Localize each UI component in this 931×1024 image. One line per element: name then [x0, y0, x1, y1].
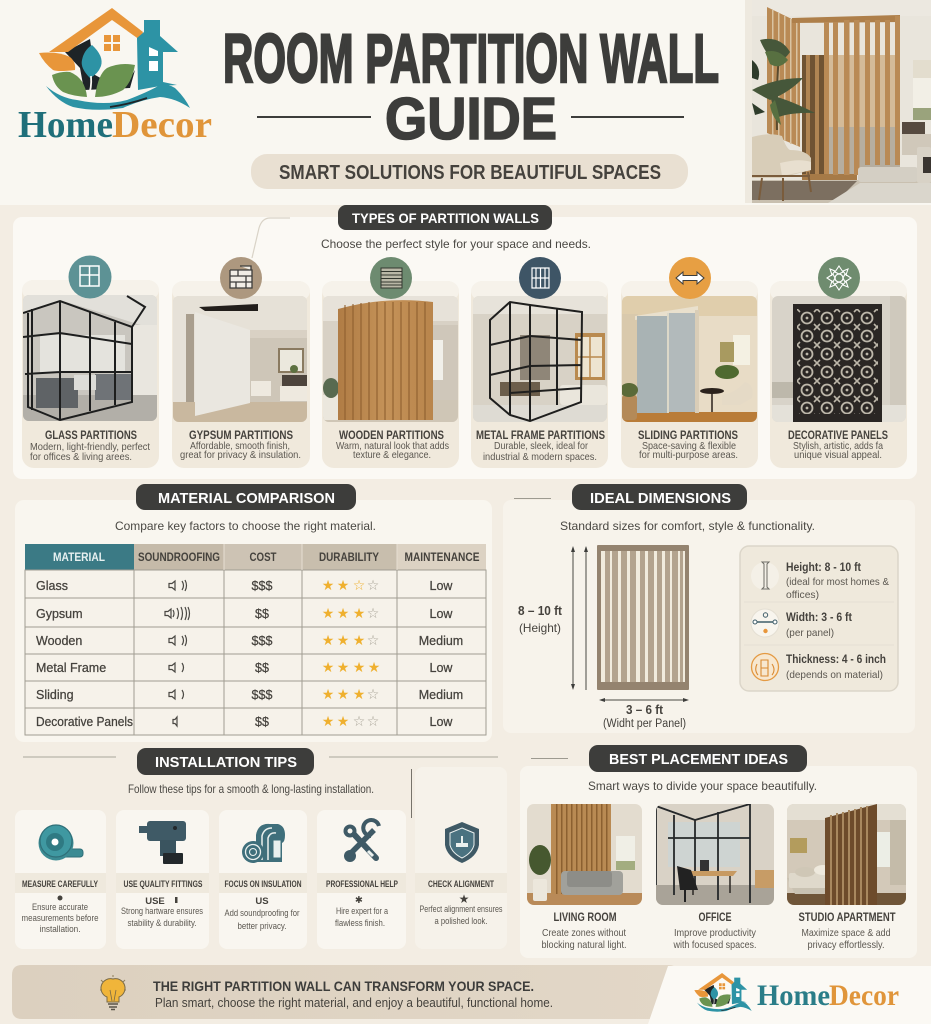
tip: focus on insulation: better privacy.	[238, 921, 286, 932]
tip: check alignment: ★	[459, 892, 469, 906]
photo: living room	[527, 804, 642, 905]
row: metal frame: ★	[337, 660, 349, 676]
icon: thickness	[752, 654, 778, 680]
label: office: OFFICE	[698, 910, 732, 924]
title	[223, 20, 719, 152]
text: thickness	[786, 654, 886, 681]
row: wooden	[36, 633, 463, 649]
row: decorative panels: ☆	[367, 714, 379, 730]
header photo strip	[745, 0, 752, 203]
card: metal frame partitions	[471, 257, 608, 468]
idea: living room	[527, 804, 642, 951]
tip: check alignment: CHECK ALIGNMENT	[428, 879, 494, 890]
icon: metal grid	[519, 257, 561, 299]
row: gypsum: ★	[337, 606, 349, 622]
heading pill: placement	[589, 745, 807, 772]
description: decorative	[793, 440, 883, 461]
logo: small HomeDecor: Home	[757, 979, 830, 1012]
row: gypsum: ★	[353, 606, 365, 622]
section: installation tips	[15, 748, 507, 949]
row: glass: Glass	[36, 579, 68, 593]
description: decorative: Stylish, artistic, adds fa	[793, 440, 883, 452]
icon: drill	[139, 821, 186, 864]
section: ideal dimensions	[503, 484, 915, 733]
tip: professional help: Hire expert for a	[336, 906, 389, 917]
tip: professional help: PROFESSIONAL HELP	[326, 879, 398, 890]
description: sliding: Space-saving & flexible	[642, 440, 736, 452]
icon: insulation roll	[242, 824, 285, 863]
heading pill: installation: INSTALLATION TIPS	[155, 754, 297, 771]
tip: measure carefully: MEASURE CAREFULLY	[22, 879, 98, 890]
description: glass: Modern, light-friendly, perfect	[30, 441, 150, 453]
label: decorative: DECORATIVE PANELS	[788, 428, 888, 442]
text: width	[786, 612, 852, 639]
tip: focus on insulation: Add soundproofing for	[224, 908, 300, 919]
diagram: slatted panel with size arrows	[518, 545, 689, 730]
row: metal frame: ★	[368, 660, 380, 676]
logo: HomeDecor: Decor	[112, 104, 212, 146]
photo: studio	[787, 804, 906, 905]
row: decorative panels: ★	[322, 714, 334, 730]
heading pill: placement: BEST PLACEMENT IDEAS	[609, 751, 788, 768]
diagram: slatted panel with size arrows: 3 – 6 ft	[626, 703, 664, 717]
text: thickness: (depends on material)	[786, 669, 883, 681]
description: metal frame	[483, 440, 597, 463]
row: sliding: ☆	[367, 687, 379, 703]
icon: wood panel	[370, 257, 412, 299]
tip: check alignment: a polished look.	[434, 916, 488, 927]
idea: office	[656, 804, 774, 951]
row: wooden: ★	[353, 633, 365, 649]
row: wooden: ★	[337, 633, 349, 649]
row: metal frame: Low	[430, 661, 453, 675]
row: glass: ☆	[353, 578, 365, 594]
description: glass: for offices & living arees.	[30, 451, 132, 463]
description: glass	[30, 441, 150, 463]
header band	[0, 0, 931, 205]
description: metal frame: Durable, sleek, ideal for	[494, 440, 588, 452]
photo: metal frame	[473, 296, 607, 422]
text: thickness: Thickness: 4 - 6 inch	[786, 654, 886, 666]
row: glass: $$$	[252, 579, 273, 593]
title: GUIDE	[385, 86, 557, 152]
card: gypsum partitions	[172, 257, 310, 468]
row: sliding: Sliding	[36, 688, 74, 702]
heading pill: dimensions: IDEAL DIMENSIONS	[590, 490, 731, 507]
comparison table: COST	[250, 552, 276, 564]
heading pill: dimensions	[572, 484, 747, 510]
photo: gypsum	[173, 296, 307, 422]
row: decorative panels: $$	[255, 715, 269, 729]
description: sliding	[639, 440, 738, 461]
diagram: slatted panel with size arrows: (Height)	[519, 621, 561, 635]
tip: measure carefully	[15, 810, 106, 949]
row: decorative panels	[36, 714, 453, 730]
label: studio: STUDIO APARTMENT	[798, 910, 896, 924]
header photo: slatted wood partition in living room	[752, 0, 931, 203]
tip: professional help	[317, 810, 406, 949]
row: gypsum: Gypsum	[36, 607, 83, 621]
row: sliding: ★	[337, 687, 349, 703]
label: metal frame: METAL FRAME PARTITIONS	[476, 428, 605, 442]
row: glass: Low	[430, 579, 453, 593]
icon: bricks	[220, 257, 262, 299]
row: metal frame: ★	[353, 660, 365, 676]
tip: focus on insulation: US	[255, 896, 269, 907]
row: sliding	[36, 687, 463, 703]
tip: use quality fittings: USE QUALITY FITTINGS	[124, 879, 202, 890]
tip: measure carefully: measurements before	[22, 913, 98, 924]
row: decorative panels: ☆	[353, 714, 365, 730]
label: glass: GLASS PARTITIONS	[45, 428, 137, 442]
label: sliding: SLIDING PARTITIONS	[638, 428, 738, 442]
row: glass: ★	[322, 578, 334, 594]
heading pill: material	[136, 484, 356, 510]
photo: wooden	[323, 296, 458, 422]
description: gypsum: great for privacy & insulation.	[180, 449, 301, 461]
row: wooden: ☆	[367, 633, 379, 649]
photo: office	[656, 804, 774, 905]
icon: sliding arrows	[669, 257, 711, 299]
icon: wrench and screwdriver	[344, 820, 379, 862]
icon: width	[751, 609, 779, 637]
tip: focus on insulation: FOCUS ON INSULATION	[224, 879, 302, 890]
description: office	[673, 927, 757, 951]
label: living room: LIVING ROOM	[554, 910, 616, 924]
tip: use quality fittings	[116, 810, 209, 949]
row: decorative panels: Low	[430, 715, 453, 729]
text: height	[786, 562, 889, 601]
description: office: with focused spaces.	[673, 939, 756, 951]
comparison table: SOUNDROOFING	[138, 552, 220, 564]
row: wooden: ★	[322, 633, 334, 649]
subtitle pill	[251, 154, 688, 189]
description: metal frame: industrial & modern spaces.	[483, 451, 597, 463]
label: wooden: WOODEN PARTITIONS	[339, 428, 444, 442]
description: studio	[802, 927, 891, 951]
text: height: offices)	[786, 589, 819, 601]
description: living room: Create zones without	[542, 927, 626, 939]
row: glass: ★	[337, 578, 349, 594]
tip: measure carefully: installation.	[40, 924, 80, 935]
tip: measure carefully: Ensure accurate	[32, 902, 88, 913]
logo: HomeDecor: Home	[18, 104, 113, 146]
comparison table: MATERIAL	[53, 552, 105, 564]
photo: decorative	[772, 296, 906, 422]
description: decorative: unique visual appeal.	[794, 449, 882, 461]
row: decorative panels: Decorative Panels	[36, 715, 133, 729]
row: sliding: $$$	[252, 688, 273, 702]
tip: check alignment	[415, 767, 507, 949]
tip: professional help: ✱	[355, 895, 363, 906]
row: gypsum: ☆	[367, 606, 379, 622]
section: best placement ideas	[520, 745, 917, 958]
row: metal frame	[36, 660, 453, 676]
text: width: Width: 3 - 6 ft	[786, 612, 852, 624]
row: sliding: ★	[322, 687, 334, 703]
subtitle pill: SMART SOLUTIONS FOR BEAUTIFUL SPACES	[279, 162, 661, 184]
description: studio: Maximize space & add	[802, 927, 891, 939]
section: types of partition walls	[13, 205, 917, 479]
tip: use quality fittings: USE	[145, 896, 165, 907]
heading pill: material: MATERIAL COMPARISON	[158, 490, 335, 507]
logo: small HomeDecor	[694, 973, 899, 1012]
heading pill: installation	[137, 748, 314, 775]
material intro text: Compare key factors to choose the right material.	[115, 519, 376, 533]
heading pill: types: TYPES OF PARTITION WALLS	[352, 211, 539, 226]
description: office: Improve productivity	[674, 927, 757, 939]
tip: check alignment: Perfect alignment ensures	[420, 904, 503, 915]
comparison table: DURABILITY	[319, 552, 379, 564]
tip: use quality fittings: Strong hartware ensures	[121, 906, 203, 917]
card: wooden partitions	[322, 257, 459, 468]
row: metal frame: $$	[255, 661, 269, 675]
description: living room: blocking natural light.	[542, 939, 626, 951]
row: gypsum	[36, 606, 453, 622]
row: wooden: $$$	[252, 634, 273, 648]
tip: professional help: flawless finish.	[335, 918, 385, 929]
card: decorative panels	[770, 257, 907, 468]
dimensions intro text: Standard sizes for comfort, style & functionality.	[560, 519, 815, 533]
tip: focus on insulation	[219, 810, 307, 949]
diagram: slatted panel with size arrows: (Widht per Panel)	[603, 718, 686, 730]
icon: window	[68, 256, 112, 298]
logo: small HomeDecor: Decor	[829, 979, 899, 1012]
row: gypsum: ★	[322, 606, 334, 622]
footer banner	[12, 965, 676, 1019]
description: wooden	[336, 440, 449, 461]
comparison table	[25, 544, 486, 735]
icon: shield	[445, 822, 479, 863]
row: glass: ☆	[367, 578, 379, 594]
description: sliding: for multi-purpose areas.	[639, 449, 738, 461]
row: glass	[36, 578, 453, 594]
heading pill: types	[338, 205, 552, 230]
card: glass partitions	[22, 256, 159, 468]
description: gypsum: Affordable, smooth finish,	[190, 440, 290, 452]
row: metal frame: ★	[322, 660, 334, 676]
icon: tape measure	[38, 825, 83, 860]
row: metal frame: Metal Frame	[36, 661, 106, 675]
icon: height	[751, 562, 779, 590]
row: gypsum: Low	[430, 607, 453, 621]
row: sliding: ★	[353, 687, 365, 703]
footer message: THE RIGHT PARTITION WALL CAN TRANSFORM YOUR SPACE.	[153, 978, 534, 994]
idea: studio apartment	[787, 804, 906, 951]
section: material comparison	[15, 484, 492, 742]
types intro text: Choose the perfect style for your space and needs.	[321, 237, 591, 251]
icon: light bulb	[100, 975, 126, 1010]
placement intro text: Smart ways to divide your space beautifully.	[588, 779, 817, 793]
description: wooden: texture & elegance.	[353, 449, 431, 461]
comparison table: MAINTENANCE	[404, 552, 480, 564]
label: gypsum: GYPSUM PARTITIONS	[189, 428, 293, 442]
row: sliding: Medium	[419, 688, 463, 702]
dimension info box	[740, 546, 898, 691]
description: wooden: Warm, natural look that adds	[336, 440, 449, 452]
diagram: slatted panel with size arrows: 8 – 10 ft	[518, 604, 563, 618]
row: gypsum: $$	[255, 607, 269, 621]
row: wooden: Wooden	[36, 634, 82, 648]
description: studio: privacy effortlessly.	[808, 939, 884, 951]
footer logo area	[648, 966, 931, 1024]
card: sliding partitions	[620, 257, 758, 468]
footer message: Plan smart, choose the right material, and enjoy a beautiful, functional home.	[155, 996, 553, 1010]
logo: HomeDecor	[18, 8, 212, 146]
tip: use quality fittings: stability & durability.	[128, 918, 196, 929]
row: wooden: Medium	[419, 634, 463, 648]
installation intro text: Follow these tips for a smooth & long-lasting installation.	[128, 782, 374, 796]
text: width: (per panel)	[786, 627, 834, 639]
photo: sliding	[620, 296, 757, 422]
row: decorative panels: ★	[337, 714, 349, 730]
photo: glass	[23, 295, 157, 421]
footer message	[153, 978, 553, 1010]
text: height: Height: 8 - 10 ft	[786, 562, 861, 574]
text: height: (ideal for most homes &	[786, 576, 889, 588]
icon: ornament	[818, 257, 860, 299]
description: gypsum	[180, 440, 301, 461]
description: living room	[542, 927, 626, 951]
